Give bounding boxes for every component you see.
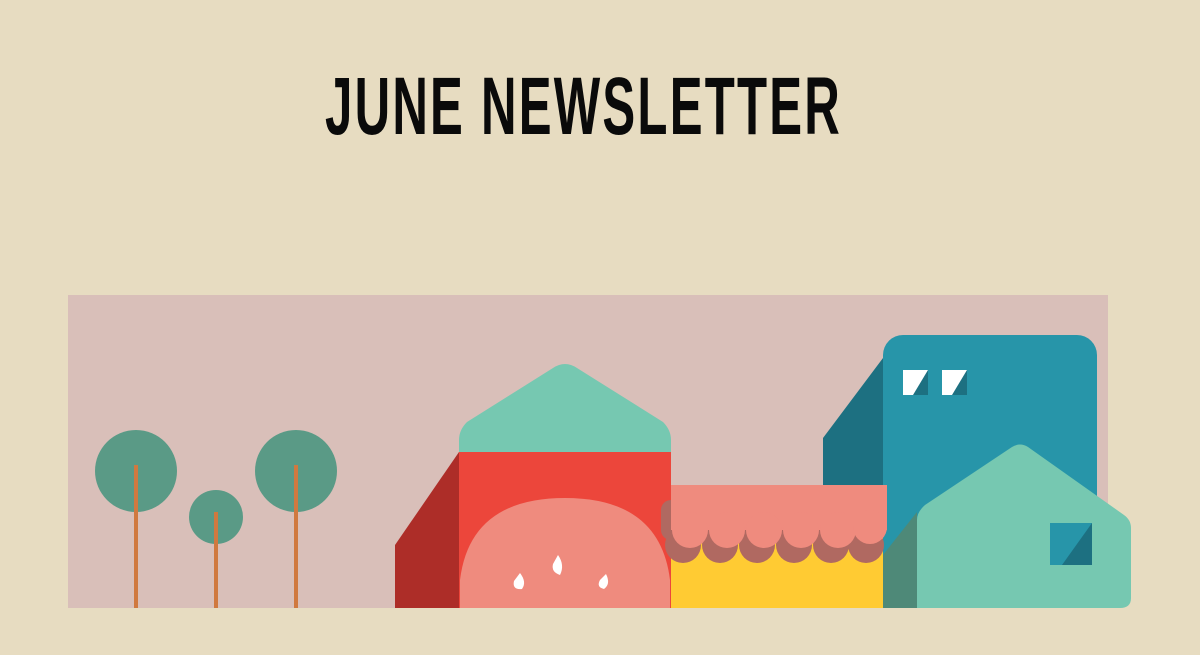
window [1050, 523, 1092, 565]
building: red house [395, 364, 671, 608]
awning shadow [661, 500, 884, 563]
building: blue tower [823, 335, 1097, 608]
panel: street scene [68, 295, 1131, 608]
seeds [514, 555, 608, 589]
tree: left [95, 430, 177, 608]
tree: right [255, 430, 337, 608]
building: yellow shop [661, 485, 887, 608]
awning [671, 485, 887, 548]
title: JUNE NEWSLETTER [325, 61, 840, 152]
tree: small middle [189, 490, 243, 608]
dome door [460, 498, 670, 608]
windows [903, 370, 967, 395]
roof [459, 364, 671, 452]
building: teal house [883, 444, 1131, 608]
